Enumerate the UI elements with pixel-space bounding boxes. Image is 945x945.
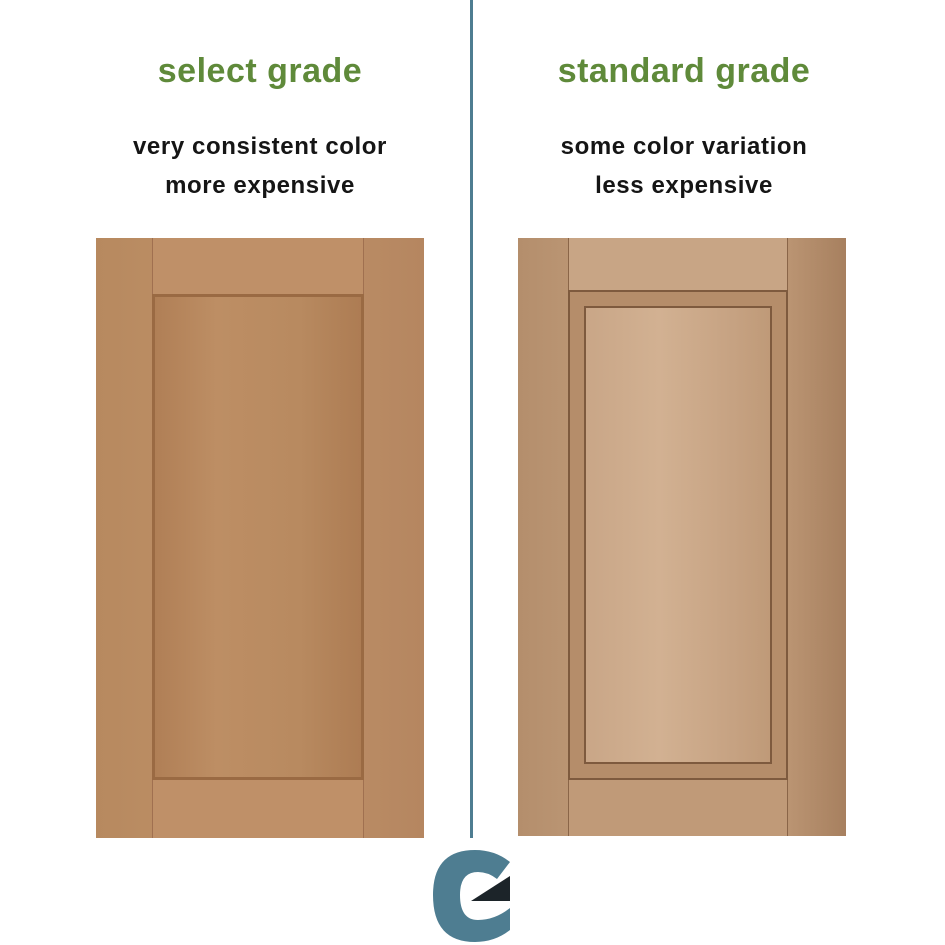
heading: select grade: select grade [158, 52, 362, 90]
top rail [568, 238, 788, 290]
bottom rail [152, 780, 364, 838]
text: select grade description: very consistent color [133, 133, 387, 160]
text: standard grade description [561, 133, 807, 199]
logo triangle [471, 876, 510, 901]
molding frame [568, 290, 788, 780]
text: select grade description: more expensive [165, 172, 355, 199]
door: standard grade [518, 238, 846, 836]
divider line [470, 0, 473, 838]
text: standard grade description: some color variation [561, 133, 807, 160]
logo [433, 850, 510, 942]
door: select grade [96, 238, 424, 838]
inner panel [584, 306, 772, 764]
panel [152, 294, 364, 780]
text: standard grade description: less expensive [595, 172, 773, 199]
bottom rail [568, 780, 788, 836]
text: select grade description [133, 133, 387, 199]
heading: standard grade: standard grade [558, 52, 810, 90]
top rail [152, 238, 364, 294]
